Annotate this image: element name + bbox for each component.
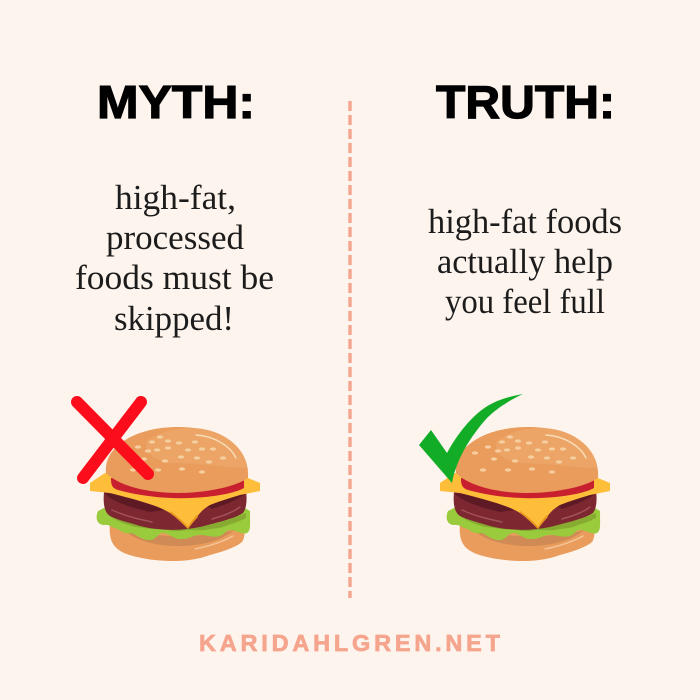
panel: myth: [75, 76, 274, 561]
heading: myth: MYTH:: [97, 76, 255, 128]
text block: truth statement: you feel full: [445, 282, 605, 321]
text block: myth statement: [75, 178, 274, 338]
text block: myth statement: high-fat,: [115, 178, 236, 217]
divider: dashed line: [348, 101, 352, 598]
heading: truth: TRUTH:: [436, 76, 615, 128]
panel: truth: [419, 76, 622, 561]
text block: myth statement: processed: [106, 218, 244, 257]
icon: red cross: [77, 402, 148, 478]
text block: myth statement: foods must be: [75, 258, 274, 297]
text block: truth statement: high-fat foods: [428, 202, 622, 241]
icon: burger: [440, 427, 610, 561]
text block: truth statement: actually help: [437, 242, 613, 281]
text block: truth statement: [428, 202, 622, 321]
icon: green check mark: [419, 394, 523, 483]
text block: myth statement: skipped!: [114, 299, 234, 338]
footer: website: KARIDAHLGREN.NET: [199, 630, 501, 656]
icon: burger: [90, 427, 260, 561]
